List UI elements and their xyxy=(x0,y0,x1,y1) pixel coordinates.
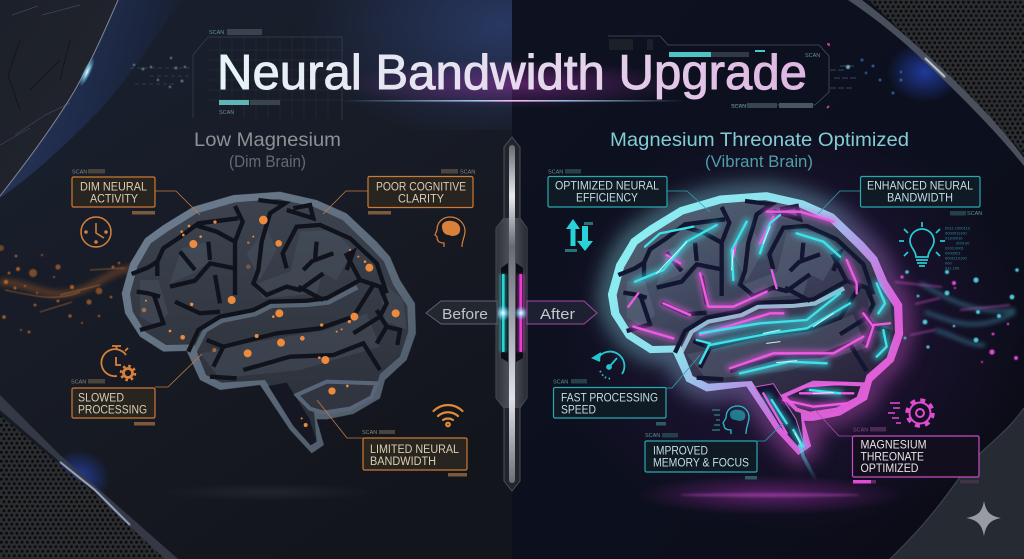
heading: magnesium threonate optimized: (Vibrant Brain) xyxy=(705,152,813,171)
callout: magnesium threonate optimized: MAGNESIUM xyxy=(860,440,926,452)
background: left half xyxy=(0,0,512,559)
corner: marble top-left xyxy=(0,0,182,198)
callout: enhanced neural bandwidth xyxy=(818,176,982,217)
icon: stopwatch with gear xyxy=(101,346,135,380)
callout: improved memory and focus: SCAN xyxy=(645,433,660,439)
callout: fast processing speed: FAST PROCESSING xyxy=(561,392,658,404)
callout: optimized neural efficiency xyxy=(548,169,710,212)
callout: slowed processing: SCAN xyxy=(71,380,86,386)
callout: improved memory and focus: MEMORY & FOCUS xyxy=(653,458,749,470)
data readout: 000100 xyxy=(956,240,970,246)
particles: title side right xyxy=(846,59,902,94)
callout: improved memory and focus: IMPROVED xyxy=(653,446,708,458)
corner: grey bottom-right xyxy=(890,408,1024,559)
heading: magnesium threonate optimized xyxy=(610,129,909,171)
callout: limited neural bandwidth: BANDWIDTH xyxy=(370,456,436,468)
callout: slowed processing: SLOWED xyxy=(78,392,124,404)
callout: dim neural activity: SCAN xyxy=(72,170,87,176)
arrow label: after: After xyxy=(540,306,575,323)
corner: hex mesh top-right xyxy=(848,0,1024,166)
icon: speedometer xyxy=(593,352,624,379)
callout: fast processing speed: SCAN xyxy=(553,380,568,386)
heading: magnesium threonate optimized: Magnesium Threonate Optimized xyxy=(610,129,909,151)
title HUD: left frame: SCAN xyxy=(209,30,224,36)
callout: fast processing speed xyxy=(553,355,700,426)
callout: dim neural activity: ACTIVITY xyxy=(90,194,138,206)
arrow label: before xyxy=(426,301,497,324)
brain: vibrant (optimized) xyxy=(608,193,903,482)
callout: limited neural bandwidth: SCAN xyxy=(362,430,377,436)
callout: enhanced neural bandwidth: SCAN xyxy=(967,211,982,217)
callout: slowed processing: PROCESSING xyxy=(78,404,147,416)
callout: poor cognitive clarity xyxy=(323,169,475,214)
title: Neural Bandwidth Upgrade xyxy=(217,46,807,100)
icon: head with brain xyxy=(435,217,465,247)
icon: up and down arrows xyxy=(565,219,593,252)
heading: low magnesium: Low Magnesium xyxy=(194,129,341,151)
particles: title side left xyxy=(133,57,186,88)
callout: optimized neural efficiency: EFFICIENCY xyxy=(576,192,638,204)
heading: low magnesium xyxy=(194,129,341,171)
callout: enhanced neural bandwidth: BANDWIDTH xyxy=(887,192,953,204)
callout: improved memory and focus xyxy=(645,423,783,480)
data readout: 0100.0001 xyxy=(945,246,965,250)
icon: gear with motion lines xyxy=(888,400,933,426)
callout: slowed processing xyxy=(71,354,202,426)
title HUD: left frame: SCAN xyxy=(219,110,234,116)
icon: head with brain, memory xyxy=(712,406,749,434)
title HUD: right frame: SCAN xyxy=(731,104,746,110)
icon: wifi xyxy=(434,405,462,426)
data readout: 0000001 xyxy=(945,250,961,256)
particles: cyan and magenta stream xyxy=(895,268,1019,363)
callout: poor cognitive clarity: CLARITY xyxy=(398,194,444,206)
icon: lightbulb xyxy=(899,222,945,266)
callout: magnesium threonate optimized: SCAN xyxy=(853,428,868,434)
callout: optimized neural efficiency: SCAN xyxy=(548,170,563,176)
corner: hex mesh bottom-left xyxy=(0,395,178,559)
callout: dim neural activity xyxy=(72,169,200,215)
floor glow left xyxy=(160,483,380,501)
heading: low magnesium: (Dim Brain) xyxy=(229,152,306,171)
callout: limited neural bandwidth: LIMITED NEURAL xyxy=(370,444,460,456)
data readout: 0001110100 xyxy=(945,256,967,260)
floor glow right xyxy=(635,475,905,515)
callout: magnesium threonate optimized: OPTIMIZED xyxy=(860,463,918,475)
arrow label: before: Before xyxy=(442,306,488,323)
title HUD: left frame xyxy=(130,29,342,120)
callout: poor cognitive clarity: SCAN xyxy=(460,170,475,176)
callout: fast processing speed: SPEED xyxy=(561,404,596,416)
callout: optimized neural efficiency: OPTIMIZED NEURAL xyxy=(555,180,660,192)
callout: enhanced neural bandwidth: ENHANCED NEURAL xyxy=(867,180,974,192)
title HUD: right frame xyxy=(608,36,858,110)
background: right half xyxy=(512,0,1024,559)
data readout xyxy=(945,226,971,270)
data readout: 000 xyxy=(945,260,952,266)
callout: dim neural activity: DIM NEURAL xyxy=(80,182,148,194)
data readout: 011 100 xyxy=(945,266,960,270)
callout: magnesium threonate optimized: THREONATE xyxy=(860,452,924,464)
orange particle stream xyxy=(0,245,135,333)
callout: limited neural bandwidth xyxy=(317,400,467,476)
callout: magnesium threonate optimized xyxy=(815,410,979,484)
brain: low magnesium (dim) xyxy=(122,192,416,453)
callout: poor cognitive clarity: POOR COGNITIVE xyxy=(376,182,466,194)
arrow label: after xyxy=(527,301,597,324)
central divider bar xyxy=(495,137,528,491)
title HUD: right frame: SCAN xyxy=(805,53,820,59)
data readout: 01100010 xyxy=(945,236,963,240)
data readout: 0000011100 xyxy=(945,230,967,236)
background: brain aura right xyxy=(550,120,1024,540)
background: top blue glow xyxy=(300,0,512,130)
data readout: 0011 1000110 xyxy=(945,226,971,230)
icon: clock xyxy=(81,217,111,247)
icon: four-point star xyxy=(966,501,1001,536)
